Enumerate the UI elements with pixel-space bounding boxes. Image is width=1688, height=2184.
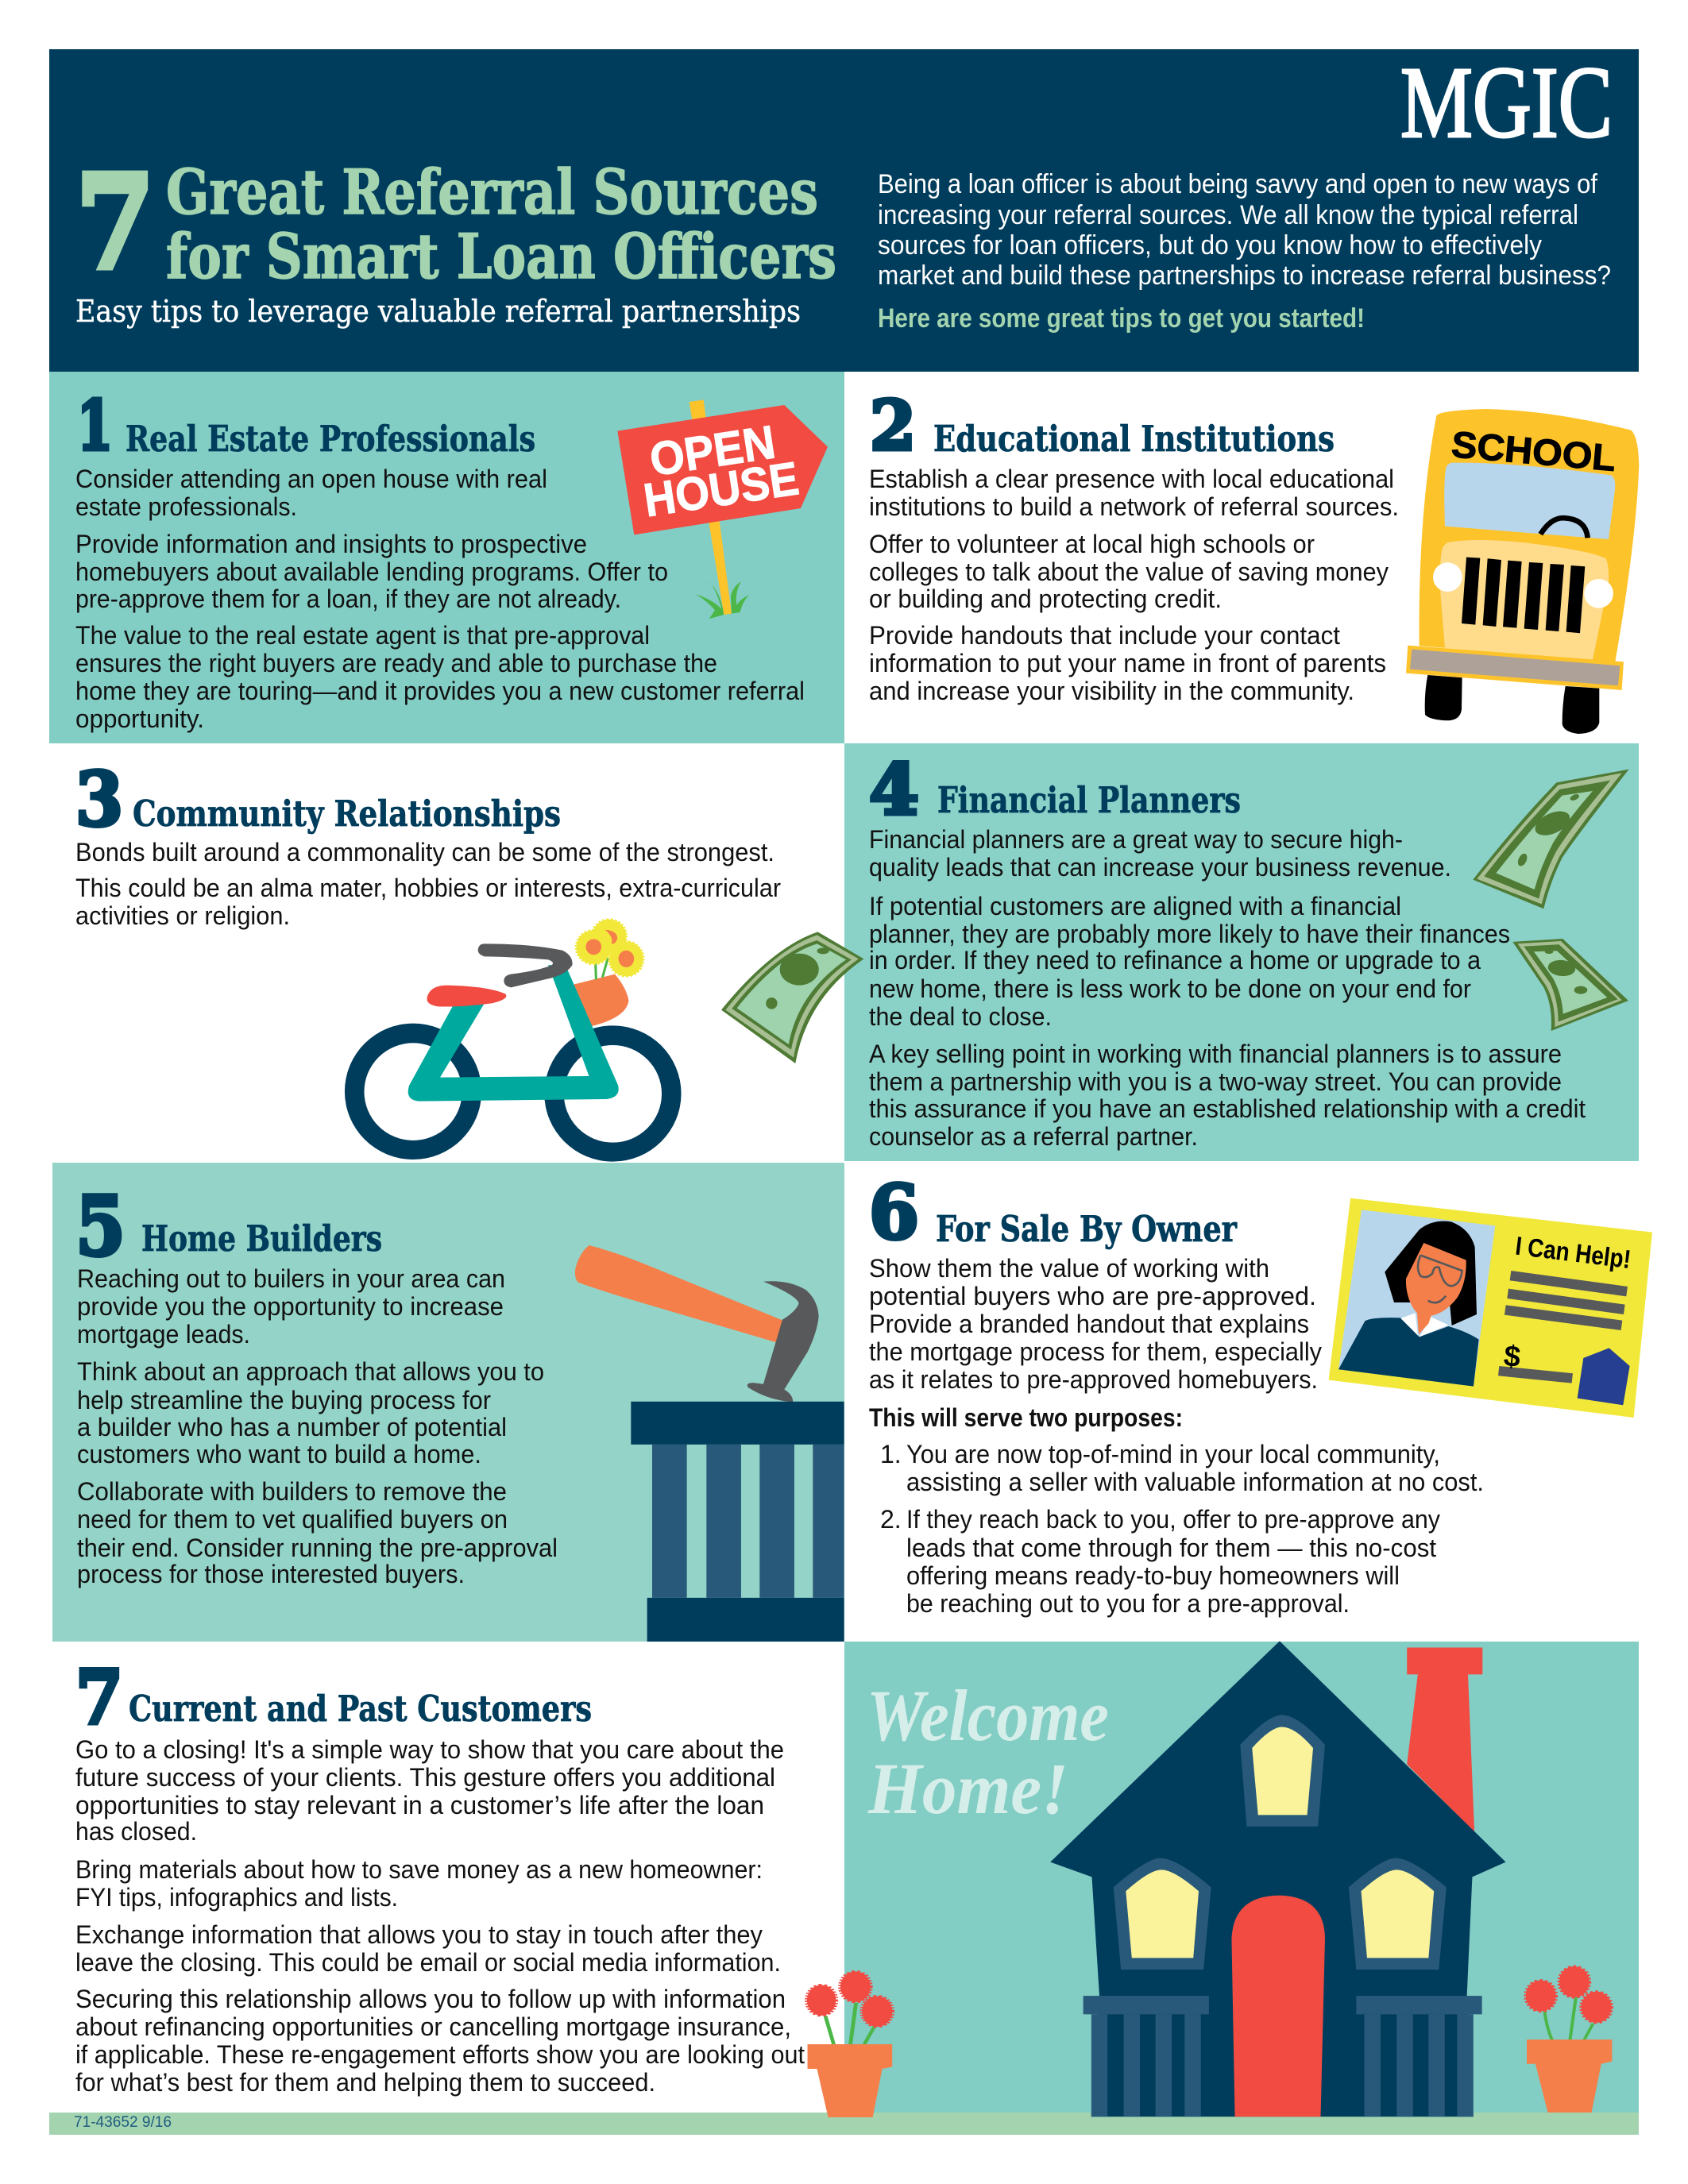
body text: 1. — [880, 1440, 902, 1468]
body text: or building and protecting credit. — [869, 585, 1222, 613]
body text: for what’s best for them and helping them to succeed. — [75, 2068, 655, 2097]
body text: Financial planners are a great way to secure high- — [869, 825, 1403, 854]
panel: 4 financial planners — [844, 743, 1639, 1161]
body text: Offer to volunteer at local high schools or — [869, 530, 1315, 558]
body text — [869, 825, 1586, 1151]
big number 7: 7 — [75, 147, 155, 299]
body text: Provide handouts that include your contact — [869, 621, 1340, 650]
icon: open house sign: HOUSE — [640, 451, 802, 527]
body text: Reaching out to builers in your area can — [77, 1264, 505, 1293]
title — [166, 156, 836, 293]
panel: 2 educational institutions — [844, 372, 1639, 743]
body text: Provide information and insights to prospective — [75, 530, 587, 558]
heading: Financial Planners — [937, 779, 1241, 821]
body text: estate professionals. — [75, 492, 297, 521]
body text: ensures the right buyers are ready and able to purchase the — [75, 649, 717, 677]
number 3: 3 — [75, 756, 123, 843]
icon: right flower pot — [1526, 1966, 1612, 2113]
icon: open house sign: OPEN — [647, 415, 778, 486]
icon: business card: $ — [1502, 1338, 1522, 1373]
body text: offering means ready-to-buy homeowners will — [906, 1561, 1400, 1590]
body text: activities or religion. — [75, 901, 290, 930]
icon: business card — [1329, 1198, 1652, 1418]
body text: Bring materials about how to save money as a new homeowner: — [75, 1855, 763, 1884]
panel: 1 real estate professionals — [49, 372, 844, 743]
title: for Smart Loan Officers — [166, 221, 836, 293]
body text: opportunity. — [75, 704, 204, 733]
body text: new home, there is less work to be done on your end for — [869, 974, 1471, 1003]
number 6: 6 — [869, 1169, 919, 1256]
body text: help streamline the buying process for — [77, 1386, 491, 1414]
intro text: Being a loan officer is about being savvy and open to new ways of — [878, 169, 1597, 199]
intro text: increasing your referral sources. We all know the typical referral — [878, 200, 1578, 230]
body text: If they reach back to you, offer to pre-approve any — [906, 1505, 1440, 1534]
panel: 7 current and past customers — [49, 1642, 844, 2113]
welcome home lettering — [867, 1675, 1109, 1829]
number 2: 2 — [870, 386, 916, 466]
body text: their end. Consider running the pre-approval — [77, 1534, 558, 1562]
intro text: sources for loan officers, but do you know how to effectively — [878, 230, 1542, 260]
body text: about refinancing opportunities or cancelling mortgage insurance, — [75, 2012, 791, 2041]
icon: bicycle — [345, 920, 682, 1162]
icon: left flower pot — [807, 1971, 892, 2117]
body text: Exchange information that allows you to stay in touch after they — [75, 1920, 763, 1949]
job code: 71-43652 9/16 — [74, 2114, 172, 2131]
body text: quality leads that can increase your business revenue. — [869, 853, 1451, 882]
panel: 5 home builders — [52, 1163, 844, 1642]
body text: opportunities to stay relevant in a customer’s life after the loan — [75, 1791, 764, 1819]
intro callout: Here are some great tips to get you started! — [878, 303, 1365, 334]
body text: Establish a clear presence with local educational — [869, 465, 1394, 493]
body text — [75, 838, 781, 930]
body text: customers who want to build a home. — [77, 1440, 481, 1468]
body text: and increase your visibility in the community. — [869, 677, 1354, 705]
body text: A key selling point in working with financial planners is to assure — [869, 1040, 1562, 1068]
body text: this assurance if you have an established relationship with a credit — [869, 1094, 1586, 1123]
body text — [869, 465, 1399, 705]
number 7: 7 — [75, 1654, 123, 1742]
heading: Home Builders — [141, 1217, 382, 1260]
body text: future success of your clients. This gesture offers you additional — [75, 1763, 775, 1792]
body text: Go to a closing! It's a simple way to show that you care about the — [75, 1735, 784, 1764]
body text: Think about an approach that allows you to — [77, 1357, 544, 1386]
body text: Securing this relationship allows you to follow up with information — [75, 1985, 786, 2013]
body text — [75, 1735, 805, 2097]
body text — [77, 1264, 558, 1588]
house porch base over strip — [1091, 2113, 1474, 2116]
body text: homebuyers about available lending programs. Offer to — [75, 558, 668, 586]
body text: process for those interested buyers. — [77, 1560, 465, 1588]
icon: school bus: SCHOOL — [1450, 423, 1617, 479]
body text: assisting a seller with valuable information at no cost. — [906, 1468, 1484, 1496]
body text: FYI tips, infographics and lists. — [75, 1883, 398, 1912]
body text: home they are touring—and it provides you a new customer referral — [75, 677, 805, 705]
body text: Consider attending an open house with real — [75, 465, 547, 493]
panel: 6 for sale by owner — [844, 1161, 1652, 1642]
body text: information to put your name in front of parents — [869, 649, 1386, 677]
icon: dollar bill crossing panels — [721, 932, 863, 1063]
intro text: market and build these partnerships to increase referral business? — [878, 260, 1611, 291]
body text: This will serve two purposes: — [869, 1403, 1183, 1432]
body text: potential buyers who are pre-approved. — [869, 1282, 1316, 1310]
panel: 3 community relationships — [49, 743, 844, 1162]
body text: as it relates to pre-approved homebuyers. — [869, 1365, 1318, 1394]
body text: them a partnership with you is a two-way street. You can provide — [869, 1067, 1562, 1096]
welcome home lettering: Home! — [867, 1748, 1068, 1829]
body text: colleges to talk about the value of saving money — [869, 558, 1389, 586]
body text: be reaching out to you for a pre-approval. — [906, 1589, 1350, 1618]
heading: For Sale By Owner — [936, 1208, 1238, 1250]
body text: leave the closing. This could be email or social media information. — [75, 1948, 781, 1977]
icon: dollar bills right — [1473, 770, 1629, 1031]
icon: business card: I Can Help! — [1514, 1231, 1632, 1274]
footer strip — [49, 2113, 1639, 2135]
icon: school bus — [1406, 409, 1639, 734]
subtitle: Easy tips to leverage valuable referral partnerships — [75, 294, 801, 329]
number 1: 1 — [77, 386, 113, 466]
number 4: 4 — [869, 748, 919, 831]
body text: counselor as a referral partner. — [869, 1122, 1198, 1151]
body text: Collaborate with builders to remove the — [77, 1477, 507, 1506]
header panel — [49, 46, 1639, 372]
body text: the deal to close. — [869, 1002, 1052, 1031]
body text: Provide a branded handout that explains — [869, 1310, 1309, 1338]
body text: This could be an alma mater, hobbies or interests, extra-curricular — [75, 874, 781, 902]
logo: MGIC: MGIC — [1400, 46, 1613, 159]
welcome home lettering: Welcome — [867, 1675, 1109, 1756]
body text: Show them the value of working with — [869, 1254, 1269, 1283]
body text: need for them to vet qualified buyers on — [77, 1505, 508, 1534]
body text: a builder who has a number of potential — [77, 1413, 507, 1441]
body text: If potential customers are aligned with a financial — [869, 892, 1401, 920]
body text: provide you the opportunity to increase — [77, 1292, 504, 1321]
panel: welcome home scene — [844, 1641, 1639, 2116]
body text: institutions to build a network of referral sources. — [869, 492, 1399, 521]
heading: Real Estate Professionals — [126, 418, 535, 460]
body text: in order. If they need to refinance a home or upgrade to a — [869, 946, 1481, 974]
icon: open house sign — [617, 399, 828, 619]
heading: Community Relationships — [133, 793, 561, 835]
icon: house — [1050, 1641, 1506, 2116]
icon: hammer and columns — [575, 1245, 844, 1642]
body text: mortgage leads. — [77, 1320, 250, 1349]
intro text — [878, 169, 1611, 291]
body text: You are now top-of-mind in your local community, — [906, 1440, 1440, 1468]
body text: Bonds built around a commonality can be some of the strongest. — [75, 838, 774, 866]
title: Great Referral Sources — [166, 156, 818, 229]
body text: leads that come through for them — this no-cost — [906, 1534, 1436, 1562]
body text: pre-approve them for a loan, if they are not already. — [75, 585, 621, 613]
heading: Current and Past Customers — [129, 1688, 592, 1730]
body text — [75, 465, 805, 733]
body text: planner, they are probably more likely to have their finances — [869, 920, 1510, 948]
body text: the mortgage process for them, especially — [869, 1337, 1322, 1366]
heading: Educational Institutions — [933, 418, 1335, 460]
body text: has closed. — [75, 1817, 197, 1846]
number 5: 5 — [75, 1179, 126, 1275]
body text: The value to the real estate agent is that pre-approval — [75, 621, 650, 650]
body text: if applicable. These re-engagement efforts show you are looking out — [75, 2040, 805, 2069]
body text: 2. — [880, 1505, 902, 1534]
body text — [869, 1254, 1484, 1618]
